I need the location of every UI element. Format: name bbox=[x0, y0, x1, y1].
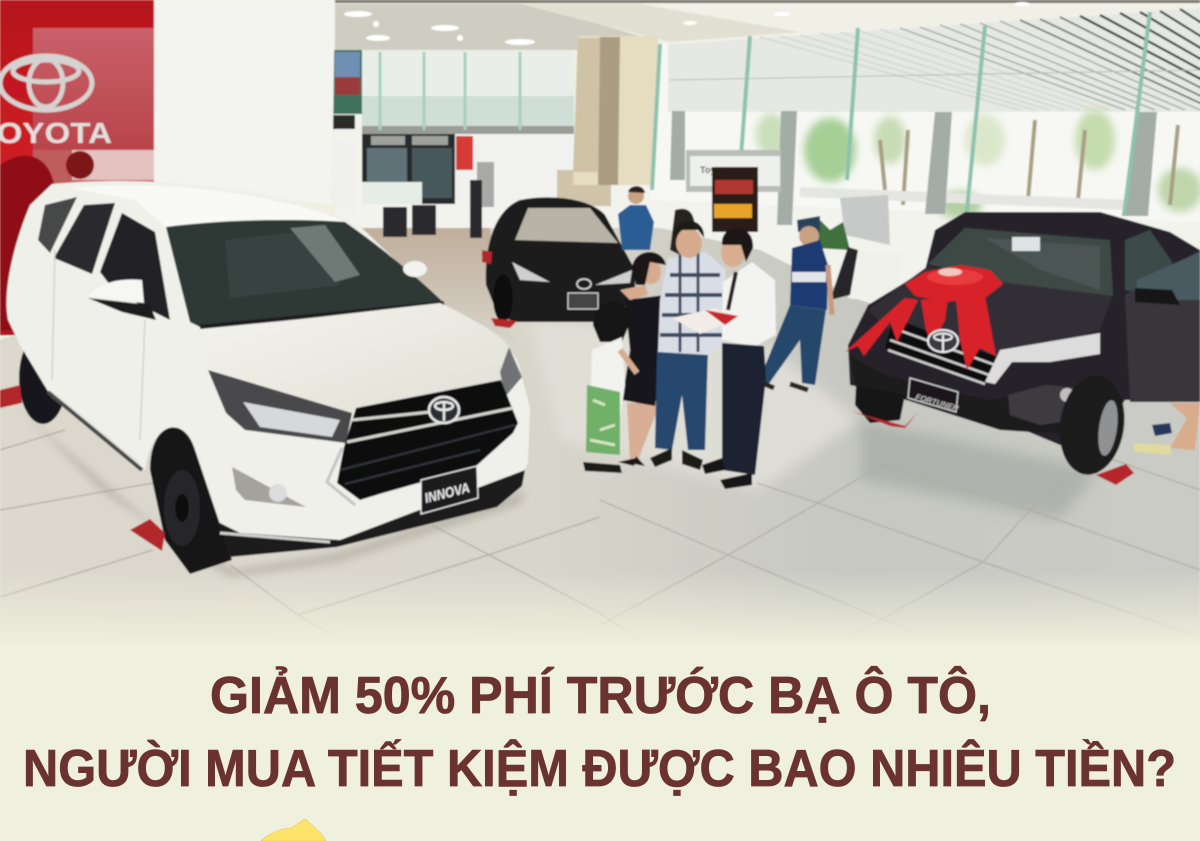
floor glossy reflection bbox=[530, 320, 860, 490]
rear office glass wall bbox=[362, 50, 611, 209]
fortuner wheels bbox=[855, 385, 905, 423]
innova wiper strip bbox=[200, 303, 444, 327]
title bbox=[23, 666, 1176, 798]
innova hood bbox=[207, 303, 512, 413]
far side mirror bbox=[403, 261, 427, 277]
fortuner windshield bbox=[928, 228, 1113, 296]
fortuner plate bbox=[908, 378, 960, 413]
fortuner hood bbox=[868, 266, 1112, 358]
innova door line bbox=[52, 250, 145, 440]
innova front wheel bbox=[150, 427, 232, 574]
innova left headlight bbox=[208, 370, 352, 443]
altis headlights bbox=[512, 262, 632, 285]
innova shadow bbox=[20, 410, 525, 578]
altis plate bbox=[568, 293, 598, 309]
floor tile lines bbox=[0, 430, 1200, 640]
innova fog lamp bbox=[232, 467, 306, 507]
fortuner logo bbox=[928, 330, 958, 352]
fortuner plate: FORTUNER bbox=[914, 392, 960, 413]
innova rear wheel bbox=[19, 332, 67, 424]
bow ribbons bbox=[845, 298, 918, 356]
parked suv outside bbox=[840, 195, 890, 245]
plant bbox=[815, 220, 850, 250]
poster panel bbox=[333, 50, 362, 129]
background customers bbox=[618, 186, 695, 255]
fortuner fog lamp bbox=[1008, 385, 1080, 425]
white innova car bbox=[7, 181, 530, 578]
outside columns bbox=[670, 111, 1157, 225]
family group bbox=[583, 221, 776, 489]
fortuner headlight bbox=[985, 333, 1100, 384]
red gift bow bbox=[845, 265, 1003, 370]
ceiling slats bbox=[670, 9, 1200, 110]
innova right headlight bbox=[500, 347, 522, 397]
outdoor trees bbox=[756, 110, 1200, 219]
innova grille bbox=[337, 380, 518, 500]
fortuner floor markers bbox=[852, 411, 1134, 485]
innova roof highlight bbox=[70, 185, 345, 227]
chairs bbox=[383, 180, 482, 238]
innova grille chrome trim bbox=[327, 448, 355, 505]
man plaid shirt bbox=[650, 221, 726, 470]
red wall bbox=[0, 0, 155, 335]
ceiling bbox=[335, 0, 1200, 60]
fortuner side window bbox=[1125, 230, 1172, 300]
toyota sign board bbox=[686, 150, 781, 192]
innova side mirror bbox=[88, 280, 144, 303]
innova body bbox=[7, 181, 530, 552]
wall backdrop bbox=[335, 100, 1200, 310]
toyota sign board: Toyota bbox=[700, 165, 730, 175]
innova logo bbox=[429, 397, 459, 423]
outside fence bbox=[800, 192, 1130, 205]
floor bbox=[0, 228, 1200, 645]
reception desk bbox=[848, 252, 905, 305]
right glass facade bbox=[650, 8, 1200, 225]
red brochure bbox=[672, 308, 740, 334]
fortuner floor reflection bbox=[860, 420, 1100, 520]
fortuner suv bbox=[848, 212, 1200, 479]
beige column bbox=[573, 36, 658, 185]
title line 1: GIẢM 50% PHÍ TRƯỚC BẠ Ô TÔ, bbox=[210, 666, 991, 725]
innova plate bbox=[421, 466, 478, 514]
innova rear side windows bbox=[38, 197, 170, 320]
altis wheel bbox=[493, 274, 513, 322]
altis windshield bbox=[515, 208, 618, 243]
side partition bbox=[330, 140, 356, 218]
fortuner bumper bbox=[850, 355, 1090, 435]
white column bbox=[154, 0, 335, 205]
toyota logo bbox=[0, 56, 92, 110]
rear shiny floor bbox=[335, 228, 520, 345]
icon: yellow shape cut off at page edge bbox=[261, 819, 326, 841]
innova floor markers bbox=[0, 385, 165, 551]
promo standee bbox=[712, 167, 758, 232]
bottom fade bbox=[0, 570, 1200, 648]
title band bbox=[0, 645, 1200, 841]
man in blue cap bbox=[760, 216, 832, 390]
glass mullions bbox=[652, 12, 1150, 220]
innova windshield bbox=[166, 220, 444, 327]
innova plate: INNOVA bbox=[423, 479, 471, 506]
fortuner grille bbox=[885, 318, 1000, 384]
altis floor markers bbox=[482, 250, 517, 328]
innova bumper bbox=[218, 470, 525, 557]
black altis car bbox=[486, 197, 636, 322]
salesman bbox=[702, 228, 776, 489]
altis logo bbox=[577, 279, 591, 289]
girl bbox=[583, 302, 637, 473]
innova sill strip bbox=[48, 392, 142, 470]
black chair bbox=[830, 247, 858, 300]
open door bbox=[1125, 250, 1200, 402]
woman bbox=[618, 252, 666, 466]
person legs at right edge bbox=[1133, 403, 1200, 455]
showroom photo bbox=[0, 0, 1200, 648]
